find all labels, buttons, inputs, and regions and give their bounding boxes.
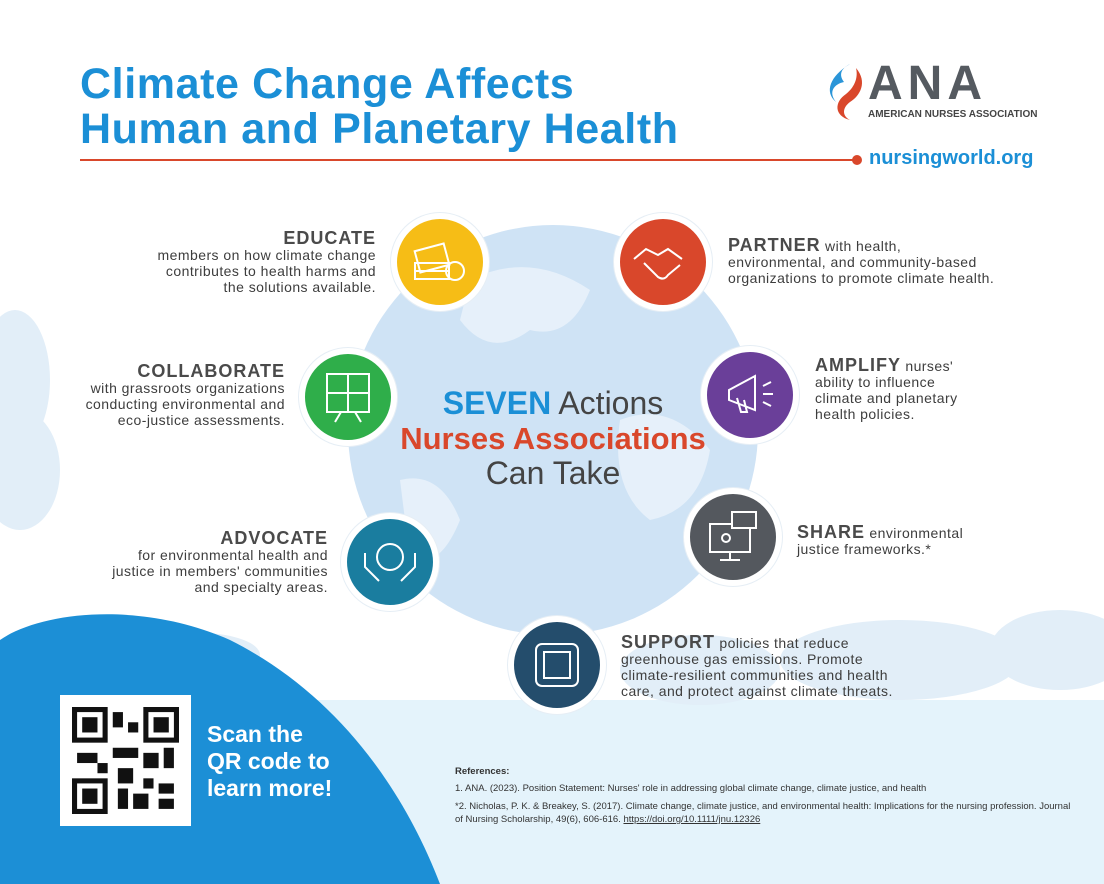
text: share: SHARE environmental xyxy=(797,522,963,542)
text: partner: PARTNER with health, xyxy=(728,235,901,255)
center heading: Nurses Associations xyxy=(400,421,706,456)
logo: ANA: ANA xyxy=(868,57,987,110)
text: advocate xyxy=(112,528,328,595)
call to action text xyxy=(207,721,332,801)
icon: educate xyxy=(391,213,489,311)
text: amplify: AMPLIFY nurses' xyxy=(815,355,953,375)
text: partner xyxy=(728,235,994,286)
text: educate: EDUCATE xyxy=(283,228,376,248)
text: advocate: justice in members' communities xyxy=(112,563,328,579)
text: partner: organizations to promote climate health. xyxy=(728,270,994,286)
icon: advocate xyxy=(341,513,439,611)
divider line with dot xyxy=(80,159,855,161)
text: share xyxy=(796,522,963,557)
text: support: greenhouse gas emissions. Promote xyxy=(621,651,863,667)
text: collaborate: with grassroots organizations xyxy=(91,380,285,396)
text: educate: contributes to health harms and xyxy=(166,263,376,279)
title: Climate Change Affects xyxy=(80,60,574,108)
title: Human and Planetary Health xyxy=(80,105,679,153)
text: collaborate: COLLABORATE xyxy=(137,361,285,381)
title xyxy=(80,60,679,153)
text: amplify: climate and planetary xyxy=(815,390,958,406)
icon: collaborate xyxy=(299,348,397,446)
text: educate: the solutions available. xyxy=(224,279,376,295)
logo: ANA xyxy=(830,57,1037,120)
references xyxy=(455,766,1070,825)
icon: amplify xyxy=(701,346,799,444)
text: educate xyxy=(158,228,376,295)
text: collaborate xyxy=(86,361,285,428)
text: support: SUPPORT policies that reduce xyxy=(621,632,849,652)
center heading: SEVEN Actions xyxy=(443,385,663,421)
text: amplify: ability to influence xyxy=(815,374,935,390)
text: amplify xyxy=(815,355,958,422)
text: support: climate-resilient communities and health xyxy=(621,667,888,683)
center heading: Can Take xyxy=(486,455,620,491)
text: support: care, and protect against climate threats. xyxy=(621,683,893,699)
QR code xyxy=(60,695,191,826)
text: amplify: health policies. xyxy=(815,406,915,422)
call to action text: learn more! xyxy=(207,775,332,801)
references: References: xyxy=(455,766,509,777)
text: collaborate: conducting environmental and xyxy=(86,396,285,412)
text: educate: members on how climate change xyxy=(158,247,376,263)
text: advocate: and specialty areas. xyxy=(194,579,328,595)
call to action text: Scan the xyxy=(207,721,303,747)
text: support xyxy=(621,632,893,699)
text: advocate: for environmental health and xyxy=(138,547,328,563)
text: partner: environmental, and community-based xyxy=(728,254,977,270)
text: advocate: ADVOCATE xyxy=(220,528,328,548)
globe xyxy=(348,225,758,635)
center heading xyxy=(400,385,706,491)
logo: ANA: AMERICAN NURSES ASSOCIATION xyxy=(868,109,1037,120)
call to action text: QR code to xyxy=(207,748,330,774)
text: share: justice frameworks.* xyxy=(797,541,931,557)
link: nursingworld.org: nursingworld.org xyxy=(869,147,1033,169)
icon: share xyxy=(684,488,782,586)
text: collaborate: eco-justice assessments. xyxy=(118,412,285,428)
icon: partner xyxy=(614,213,712,311)
references: *2. Nicholas, P. K. & Breakey, S. (2017). Climate change, climate justice, and environmental health: Implications for the nursing profession. Journal of Nursing Scholarship, 49(6), 606-616. https://doi.org/10.1111/jnu.12326 xyxy=(455,801,1070,825)
references: 1. ANA. (2023). Position Statement: Nurses' role in addressing global climate change, climate justice, and health xyxy=(455,783,926,794)
icon: support xyxy=(508,616,606,714)
